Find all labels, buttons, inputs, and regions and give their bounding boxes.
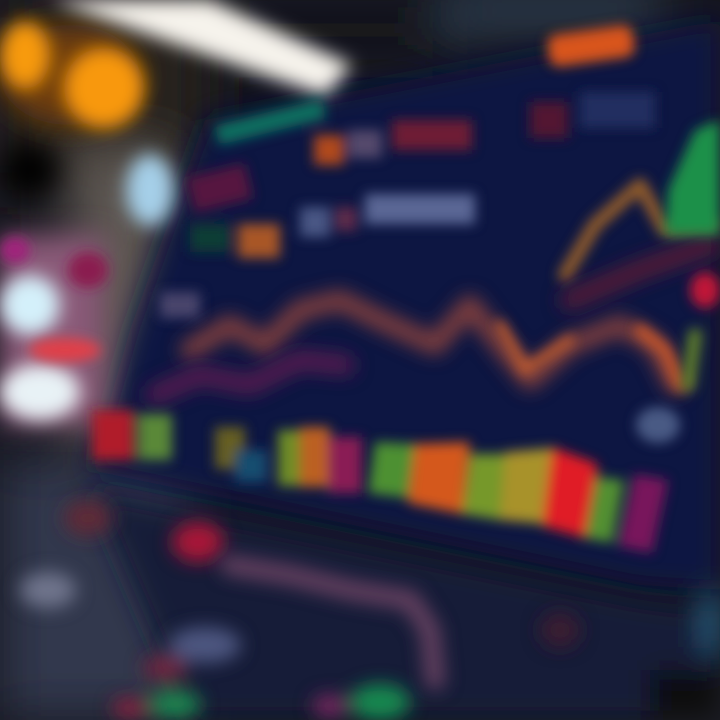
line chart: top-right green and orange [565, 120, 720, 308]
main dark screen panel [90, 20, 720, 590]
left white screen [0, 154, 174, 425]
bar strip: right bars [368, 407, 680, 553]
icon: black shadow [0, 142, 60, 198]
top-left lights [0, 21, 144, 198]
icon: orange light right [64, 48, 144, 128]
line chart: orange wave [155, 300, 695, 395]
lower keyboard highlights [20, 500, 580, 720]
top screen labels [160, 24, 655, 318]
icon: orange glow [0, 25, 140, 125]
icon: orange light left [0, 21, 50, 89]
white ceiling light [50, 0, 352, 96]
lower pink chart line [230, 565, 435, 680]
lower dark keyboard panel [90, 490, 720, 720]
bar strip: left bars [92, 410, 362, 493]
